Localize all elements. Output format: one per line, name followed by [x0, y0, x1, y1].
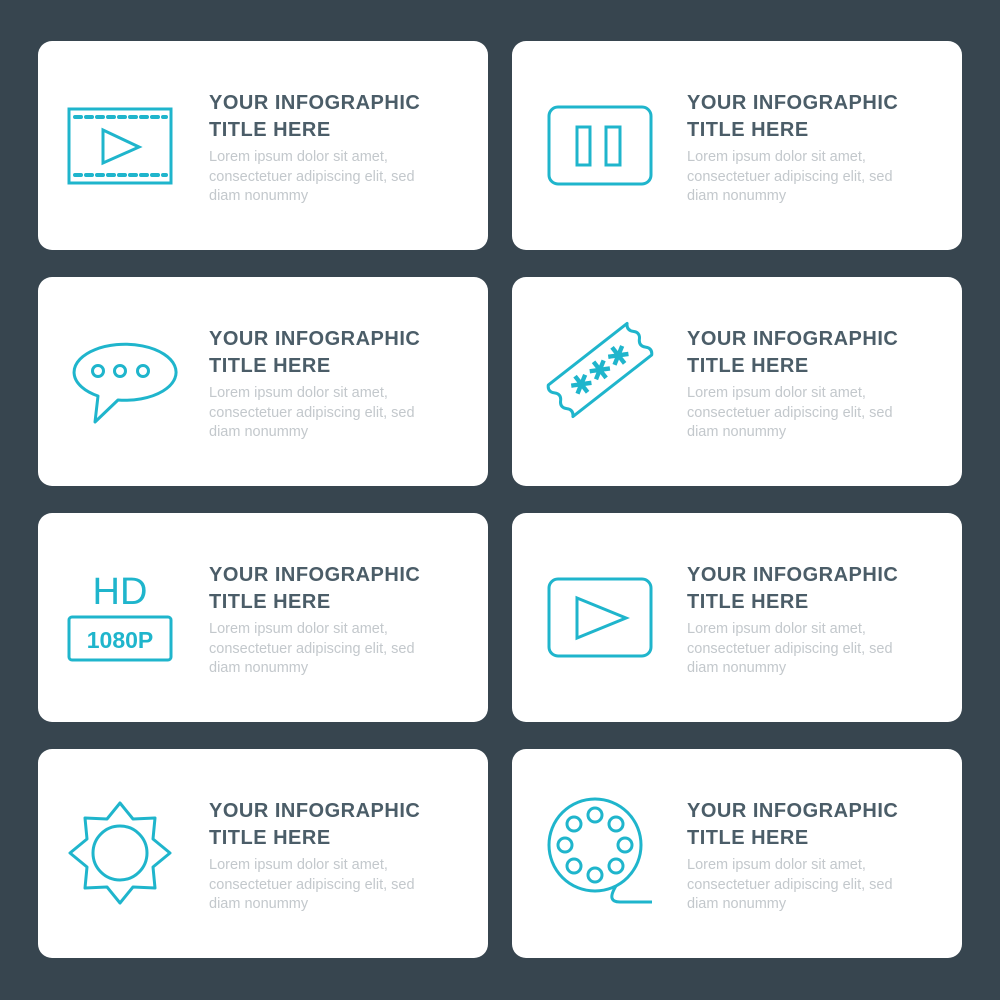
body text: diam nonummy: [209, 660, 308, 676]
title: TITLE HERE: [687, 827, 809, 849]
title: TITLE HERE: [209, 827, 331, 849]
title: TITLE HERE: [687, 355, 809, 377]
body text: Lorem ipsum dolor sit amet,: [209, 149, 388, 165]
card: film reel: [512, 749, 962, 958]
title: TITLE HERE: [209, 355, 331, 377]
card: video strip: [38, 41, 488, 250]
body text: [687, 385, 893, 440]
body text: diam nonummy: [687, 188, 786, 204]
body text: diam nonummy: [209, 188, 308, 204]
body text: Lorem ipsum dolor sit amet,: [687, 149, 866, 165]
title: YOUR INFOGRAPHIC: [209, 328, 420, 350]
body text: Lorem ipsum dolor sit amet,: [209, 857, 388, 873]
title: YOUR INFOGRAPHIC: [687, 92, 898, 114]
body text: consectetuer adipiscing elit, sed: [687, 640, 893, 656]
title: YOUR INFOGRAPHIC: [687, 564, 898, 586]
body text: consectetuer adipiscing elit, sed: [209, 168, 415, 184]
icon: ticket: [546, 322, 654, 418]
body text: consectetuer adipiscing elit, sed: [687, 876, 893, 892]
icon: pause: [548, 106, 652, 186]
card: brightness: [38, 749, 488, 958]
title: TITLE HERE: [209, 119, 331, 141]
icon: HD 1080P: [68, 571, 172, 662]
body text: [209, 621, 415, 676]
icon: speech bubble: [72, 342, 178, 424]
title: YOUR INFOGRAPHIC: [209, 800, 420, 822]
body text: Lorem ipsum dolor sit amet,: [687, 857, 866, 873]
title: [687, 564, 898, 613]
icon: film reel: [548, 798, 652, 904]
body text: [209, 385, 415, 440]
title: [687, 92, 898, 141]
icon: HD 1080P: HD: [93, 571, 147, 613]
body text: [687, 149, 893, 204]
title: [687, 328, 898, 377]
card: play: [512, 513, 962, 722]
title: YOUR INFOGRAPHIC: [209, 92, 420, 114]
title: TITLE HERE: [687, 591, 809, 613]
title: YOUR INFOGRAPHIC: [209, 564, 420, 586]
body text: Lorem ipsum dolor sit amet,: [209, 621, 388, 637]
body text: [209, 149, 415, 204]
title: YOUR INFOGRAPHIC: [687, 328, 898, 350]
icon: film play: [68, 108, 172, 184]
title: YOUR INFOGRAPHIC: [687, 800, 898, 822]
icon: HD 1080P: 1080P: [87, 627, 153, 653]
title: [209, 328, 420, 377]
body text: consectetuer adipiscing elit, sed: [209, 876, 415, 892]
body text: diam nonummy: [209, 896, 308, 912]
title: [209, 92, 420, 141]
body text: Lorem ipsum dolor sit amet,: [687, 385, 866, 401]
body text: diam nonummy: [687, 424, 786, 440]
body text: diam nonummy: [687, 896, 786, 912]
card: chat: [38, 277, 488, 486]
body text: diam nonummy: [209, 424, 308, 440]
body text: Lorem ipsum dolor sit amet,: [687, 621, 866, 637]
title: [209, 564, 420, 613]
title: TITLE HERE: [687, 119, 809, 141]
body text: [687, 857, 893, 912]
body text: consectetuer adipiscing elit, sed: [687, 168, 893, 184]
body text: consectetuer adipiscing elit, sed: [209, 640, 415, 656]
body text: [209, 857, 415, 912]
title: [687, 800, 898, 849]
icon: ticket: ✱✱✱: [562, 336, 638, 405]
body text: consectetuer adipiscing elit, sed: [687, 404, 893, 420]
title: [209, 800, 420, 849]
body text: Lorem ipsum dolor sit amet,: [209, 385, 388, 401]
body text: diam nonummy: [687, 660, 786, 676]
card: pause: [512, 41, 962, 250]
body text: [687, 621, 893, 676]
title: TITLE HERE: [209, 591, 331, 613]
icon: sun: [68, 801, 172, 905]
card: ticket: [512, 277, 962, 486]
icon: play button: [548, 578, 652, 658]
body text: consectetuer adipiscing elit, sed: [209, 404, 415, 420]
card: HD: [38, 513, 488, 722]
